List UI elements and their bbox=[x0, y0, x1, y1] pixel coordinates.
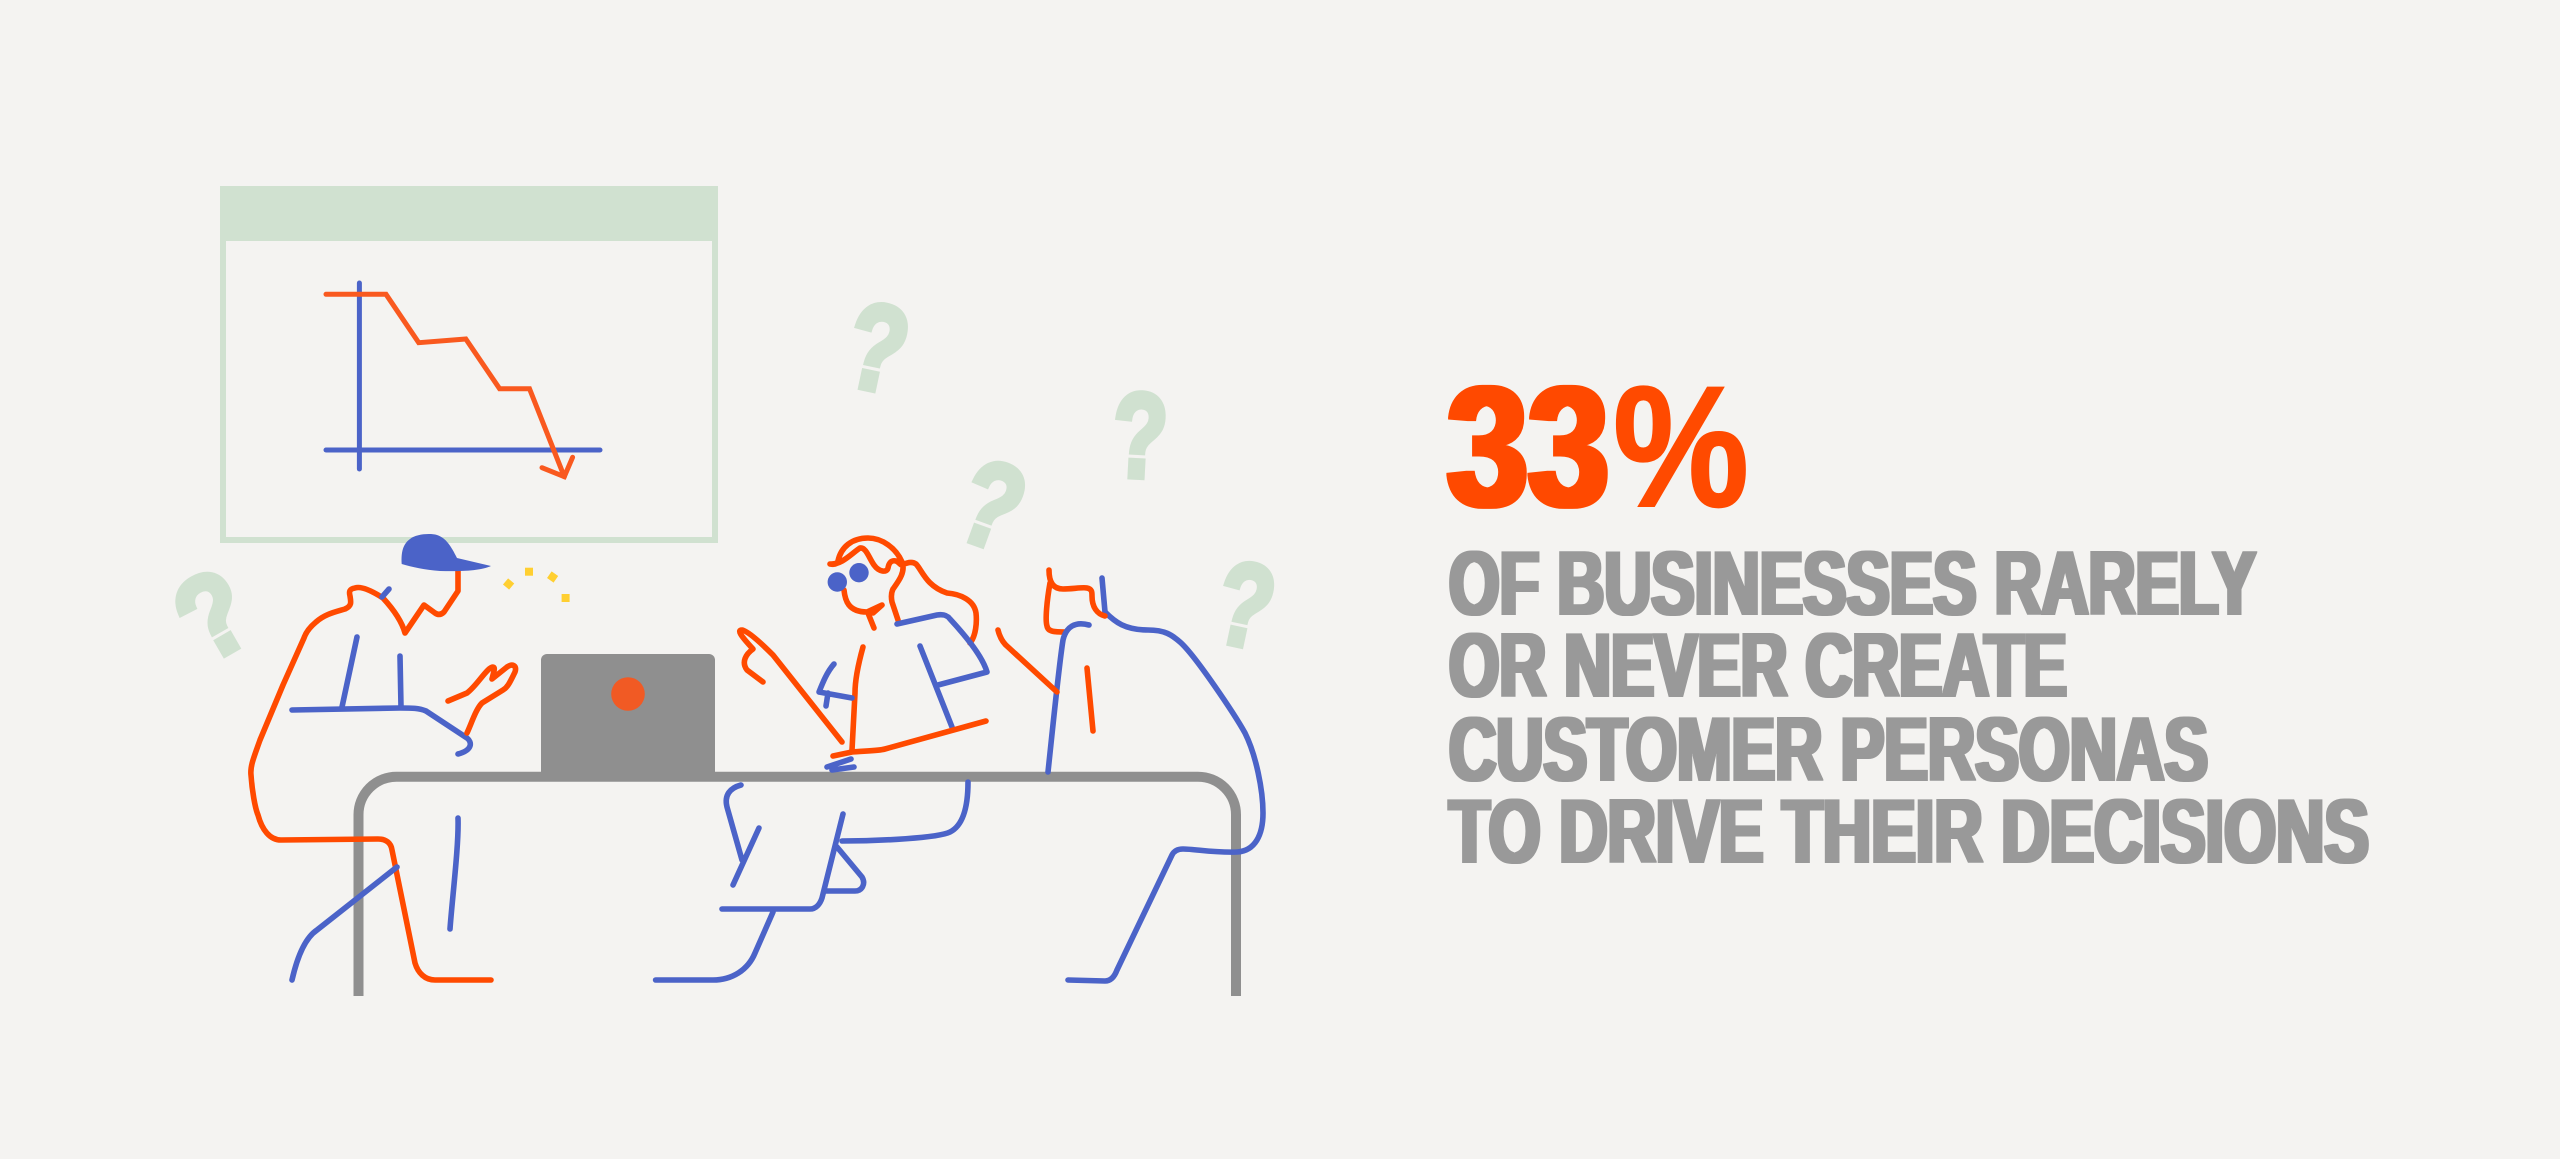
raised arm and hand bbox=[740, 630, 842, 742]
hand on table bbox=[827, 759, 854, 770]
statistic: % bbox=[1613, 351, 1749, 543]
statistic description bbox=[1449, 534, 2369, 882]
figure: woman bbox=[656, 538, 987, 980]
table bbox=[358, 777, 1236, 996]
face and neck bbox=[844, 590, 882, 628]
icon: question marks: ? bbox=[1205, 536, 1286, 676]
icon: question marks: ? bbox=[942, 432, 1042, 578]
back and leg bbox=[1068, 612, 1263, 981]
laptop bbox=[541, 654, 715, 772]
figure: man in blue cap bbox=[251, 534, 570, 980]
arm and sleeve bbox=[292, 708, 470, 754]
icon: question marks: ? bbox=[152, 542, 273, 688]
panel: presentation screen with falling chart bbox=[220, 186, 718, 540]
statistic description: OR NEVER CREATE bbox=[1449, 616, 2067, 716]
knee bbox=[726, 785, 759, 885]
statistic: 33 bbox=[1447, 351, 1609, 543]
hand bbox=[448, 665, 516, 733]
legs bbox=[656, 814, 864, 980]
jacket lines bbox=[342, 589, 401, 707]
sleeve bbox=[819, 664, 852, 706]
glasses bbox=[828, 563, 869, 592]
icon: question marks: ? bbox=[1109, 368, 1171, 504]
forearm bbox=[833, 721, 986, 756]
legs bbox=[292, 818, 458, 980]
icon: question marks bbox=[152, 276, 1286, 688]
lap bbox=[842, 782, 968, 841]
statistic description: OF BUSINESSES RARELY bbox=[1449, 534, 2256, 634]
forearm bbox=[998, 630, 1057, 692]
statistic description: CUSTOMER PERSONAS bbox=[1449, 700, 2208, 800]
chart declining line with arrow bbox=[326, 294, 573, 477]
sparks bbox=[503, 568, 570, 602]
chart axes bbox=[326, 283, 600, 469]
figure: man on right bbox=[998, 570, 1263, 981]
hair bbox=[830, 538, 976, 643]
statistic bbox=[1447, 351, 1749, 543]
cap bbox=[402, 534, 491, 571]
arm bbox=[1048, 624, 1089, 772]
laptop logo dot bbox=[611, 677, 645, 711]
head bbox=[1049, 570, 1105, 616]
torso bbox=[852, 647, 863, 750]
body outline bbox=[251, 571, 491, 980]
shirt bbox=[897, 615, 987, 727]
icon: question marks: ? bbox=[835, 276, 920, 421]
